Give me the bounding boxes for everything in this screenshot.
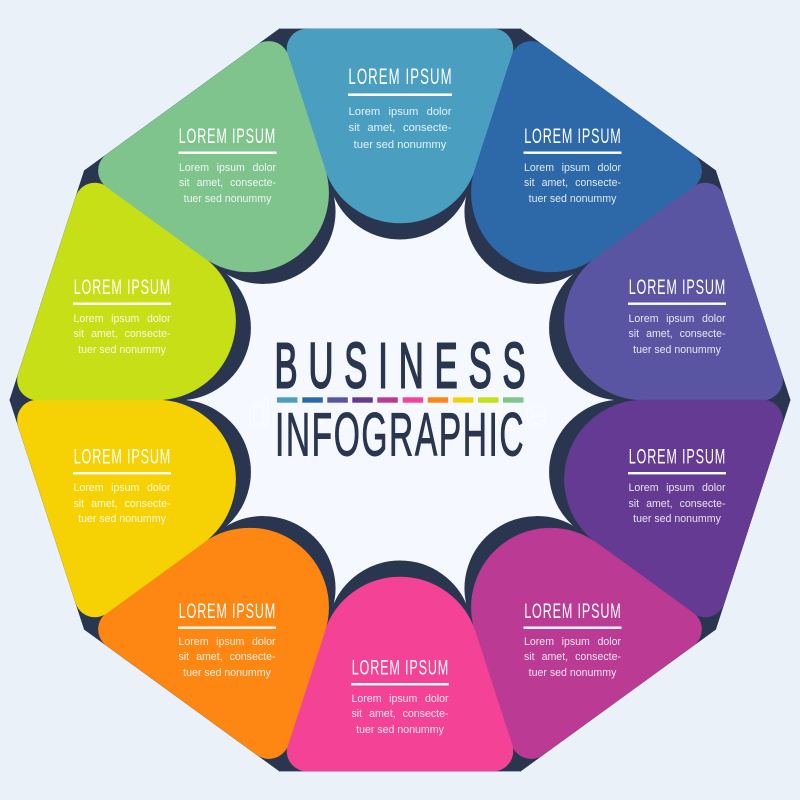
panel: top blue: LOREM IPSUM — [348, 65, 452, 89]
panel: magenta — [413, 477, 709, 767]
panel: pink: sit amet, consecte- — [352, 708, 448, 720]
panel: orange: Lorem ipsum dolor — [178, 636, 276, 648]
panel: green: LOREM IPSUM — [179, 124, 275, 148]
panel: lime: LOREM IPSUM — [74, 275, 170, 299]
panel: pink: LOREM IPSUM — [352, 655, 448, 679]
panel: top blue — [287, 29, 513, 223]
panel: dark blue: LOREM IPSUM — [524, 124, 621, 148]
panel: violet — [533, 347, 788, 622]
heading: BUSINESS: BUSINESS — [274, 329, 526, 401]
panel: indigo: Lorem ipsum dolor — [628, 312, 726, 324]
colour bar strip — [277, 397, 524, 403]
panel: top blue: Lorem ipsum dolor — [348, 106, 452, 118]
panel: violet: sit amet, consecte- — [628, 498, 726, 510]
panel: pink: Lorem ipsum dolor — [352, 692, 448, 704]
panel: magenta: tuer sed nonummy — [529, 666, 616, 678]
panel: violet: Lorem ipsum dolor — [628, 482, 726, 494]
panel: dark blue: tuer sed nonummy — [529, 192, 616, 204]
panel: yellow: Lorem ipsum dolor — [74, 482, 170, 494]
panel: yellow — [12, 347, 267, 622]
panel: indigo: sit amet, consecte- — [628, 328, 726, 340]
panel: dark blue: Lorem ipsum dolor — [524, 162, 621, 174]
panel: dark blue: sit amet, consecte- — [524, 177, 621, 189]
panel: lime: sit amet, consecte- — [74, 328, 170, 340]
panel: magenta: sit amet, consecte- — [524, 651, 621, 663]
panel: violet: tuer sed nonummy — [633, 513, 721, 525]
panel: indigo: tuer sed nonummy — [633, 344, 721, 356]
heading: INFOGRAPHIC: INFOGRAPHIC — [275, 401, 524, 469]
panel: magenta: Lorem ipsum dolor — [524, 636, 621, 648]
panel: top blue: sit amet, consecte- — [348, 122, 452, 134]
panel: green — [91, 33, 387, 323]
panel: orange: sit amet, consecte- — [178, 651, 276, 663]
panel: yellow: LOREM IPSUM — [74, 444, 170, 468]
panel: orange — [91, 477, 387, 767]
panel: dark blue — [413, 33, 709, 323]
panel: magenta: LOREM IPSUM — [524, 599, 621, 623]
panel: lime — [12, 178, 267, 453]
panel: indigo — [533, 178, 788, 453]
panel: orange: LOREM IPSUM — [179, 599, 275, 623]
panel: green: tuer sed nonummy — [184, 192, 271, 204]
panel: violet: LOREM IPSUM — [629, 444, 725, 468]
panel: lime: Lorem ipsum dolor — [74, 312, 170, 324]
panel: pink — [287, 577, 513, 771]
panel: indigo: LOREM IPSUM — [629, 275, 725, 299]
panel: yellow: tuer sed nonummy — [78, 513, 166, 525]
panel: green: Lorem ipsum dolor — [179, 162, 276, 174]
panel: pink: tuer sed nonummy — [356, 724, 444, 736]
panel: lime: tuer sed nonummy — [78, 344, 166, 356]
panel: yellow: sit amet, consecte- — [74, 498, 170, 510]
panel: orange: tuer sed nonummy — [183, 666, 271, 678]
panel: top blue: tuer sed nonummy — [354, 138, 446, 150]
panel: green: sit amet, consecte- — [179, 177, 276, 189]
watermark: dreamstime — [248, 391, 548, 435]
